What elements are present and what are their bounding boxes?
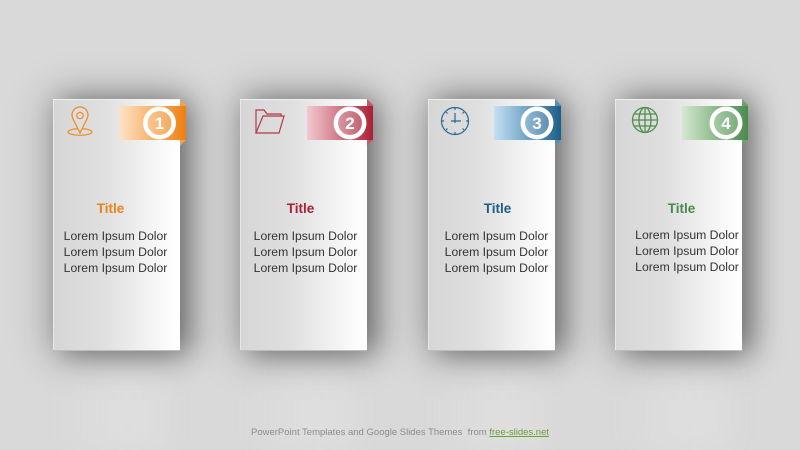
panel: card 3 shadow [428,99,555,351]
text block 1: Lorem Ipsum Dolor [64,229,167,243]
title 2: Title [287,201,314,216]
icon: folder [255,109,285,134]
text block 2: Lorem Ipsum Dolor [254,229,357,243]
number tab 2 [307,106,373,140]
badge: number 2: 2 [345,114,355,133]
text block 3: Lorem Ipsum Dolor [445,261,548,275]
icon: location pin [67,106,93,136]
badge: number 1 [143,106,176,140]
text block 3: Lorem Ipsum Dolor [445,229,548,243]
text block 2: Lorem Ipsum Dolor [254,245,357,259]
ribbon fold 3 [555,99,561,146]
title 3: Title [484,201,511,216]
badge: number 1: 1 [155,114,164,133]
title 4: Title [668,201,695,216]
ribbon fold 2 [367,99,373,146]
panel: card 4 [615,99,742,351]
icon: globe [632,106,658,134]
text block 2 [254,229,358,275]
badge: number 3 [520,106,554,140]
text block 4: Lorem Ipsum Dolor [635,244,739,258]
badge: number 4: 4 [721,114,731,133]
number tab 1 [119,106,186,140]
text block 1: Lorem Ipsum Dolor [64,245,167,259]
panel: card 3 [428,99,555,351]
badge: number 2 [334,106,366,140]
text block 4: Lorem Ipsum Dolor [635,260,739,274]
number tab 4 [682,106,748,140]
title 1: Title [97,201,124,216]
panel: card 2 shadow [240,99,367,351]
text block 1: Lorem Ipsum Dolor [64,261,167,275]
text block 4 [635,228,739,274]
panel: card 4 shadow [615,99,742,351]
badge: number 3: 3 [532,114,542,133]
ribbon fold 1 [180,99,186,146]
ribbon fold 4 [742,99,748,146]
text block 3 [445,229,548,275]
text block 4: Lorem Ipsum Dolor [635,228,739,242]
panel: card 2 [240,99,367,351]
panel: card 1 [53,99,180,351]
text block 2: Lorem Ipsum Dolor [254,261,357,275]
footer credit: PowerPoint Templates and Google Slides Themes from free-slides.net [251,427,549,438]
panel: card 1 shadow [53,99,180,351]
badge: number 4 [710,106,742,140]
number tab 3 [494,106,561,140]
text block 1 [64,229,168,275]
text block 3: Lorem Ipsum Dolor [445,245,548,259]
icon: clock [440,106,470,136]
